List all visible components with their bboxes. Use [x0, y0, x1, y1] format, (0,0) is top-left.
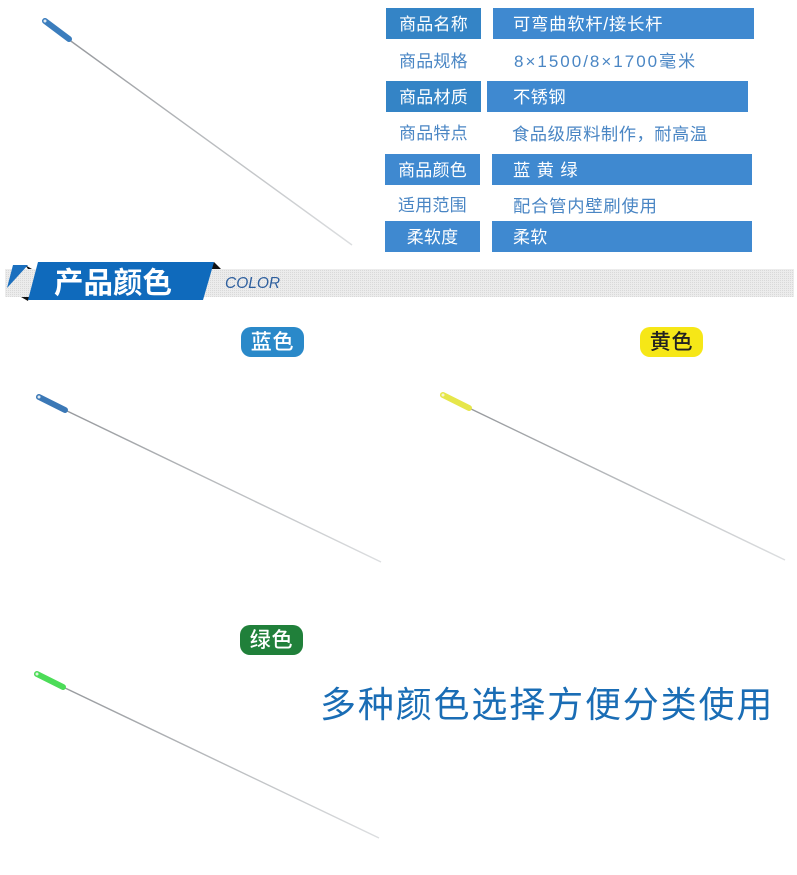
- row: product name label: 商品名称: [399, 15, 468, 34]
- row: product name value: 可弯曲软杆/接长杆: [513, 14, 663, 34]
- spec table: [385, 8, 754, 252]
- heading text: 产品颜色: [54, 267, 172, 300]
- row: colour label: [385, 154, 480, 185]
- row: usage label: 适用范围: [398, 196, 467, 215]
- row: softness label: [385, 221, 480, 252]
- row: product name value: [493, 8, 754, 39]
- row: material value: [487, 81, 748, 112]
- colour tag: yellow: 黄色: [650, 331, 693, 354]
- row: material value: 不锈钢: [513, 87, 566, 107]
- row: features value: 食品级原料制作，耐高温: [512, 124, 708, 144]
- slogan text: 多种颜色选择方便分类使用: [320, 684, 774, 725]
- row: softness value: 柔软: [513, 228, 547, 247]
- row: material label: [386, 81, 481, 112]
- product image: blue brush rod, top: [42, 18, 352, 246]
- colour tag: green: [240, 625, 303, 655]
- row: features label: 商品特点: [399, 124, 468, 143]
- row: colour value: [492, 154, 752, 185]
- colour tag: green: 绿色: [250, 629, 293, 652]
- row: softness label: 柔软度: [407, 228, 458, 247]
- colour tag: blue: 蓝色: [251, 331, 294, 354]
- section heading: product colour: [5, 262, 794, 301]
- row: colour label: 商品颜色: [398, 161, 467, 180]
- row: specification label: 商品规格: [399, 52, 468, 71]
- heading english label: COLOR: [225, 275, 280, 292]
- row: product name label: [386, 8, 481, 39]
- row: colour value: 蓝 黄 绿: [513, 160, 578, 180]
- colour tag: yellow: [640, 327, 703, 357]
- row: material label: 商品材质: [399, 88, 468, 107]
- row: specification value: 8×1500/8×1700毫米: [514, 52, 697, 71]
- row: usage value: 配合管内壁刷使用: [513, 196, 658, 216]
- colour tag: blue: [241, 327, 304, 357]
- row: softness value: [492, 221, 752, 252]
